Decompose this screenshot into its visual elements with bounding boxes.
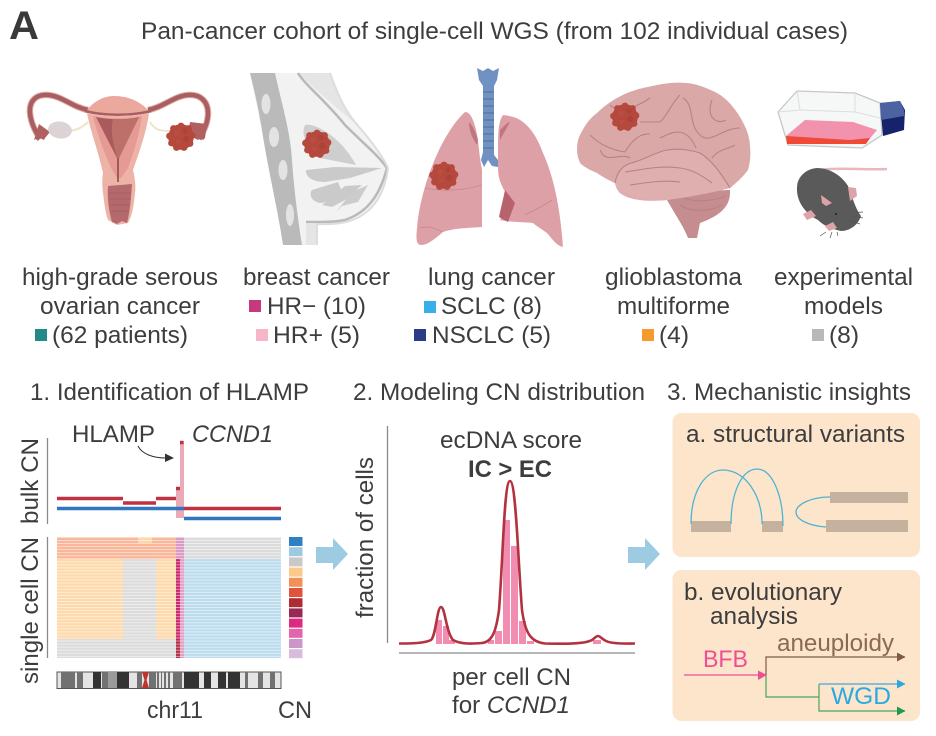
heading: step 1: 1. Identification of HLAMP	[30, 379, 309, 406]
panel heading: a. structural variants	[686, 421, 905, 448]
label: lung cancer: lung cancer	[428, 264, 555, 291]
heading: step 3: 3. Mechanistic insights	[667, 379, 911, 406]
label: WGD: WGD	[831, 683, 891, 710]
label: ovarian cancer: (62 patients)	[52, 322, 188, 349]
chromosome ideogram	[57, 672, 281, 688]
label: experimental models: experimental	[774, 264, 913, 291]
title: Pan-cancer cohort of single-cell WGS (from 102 individual cases)	[141, 18, 848, 45]
single cell heatmap	[17, 537, 281, 684]
chart title: ecDNA score	[440, 427, 582, 454]
label: lung cancer: NSCLC (5)	[432, 322, 551, 349]
label: lung cancer	[414, 264, 555, 349]
label: ovarian cancer: high-grade serous	[22, 264, 218, 291]
icon: lungs with tumor	[416, 68, 563, 247]
chart score: IC > EC	[468, 456, 552, 483]
breakpoint arcs	[691, 469, 830, 527]
label: CCND1: CCND1	[192, 421, 273, 448]
axis label: fraction of cells: fraction of cells	[352, 457, 379, 618]
red allele segments	[57, 442, 281, 508]
label: glioblastoma	[605, 264, 743, 349]
x axis label line 2: for CCND1	[452, 692, 570, 719]
label: lung cancer: SCLC (8)	[441, 293, 542, 320]
histogram bars	[436, 520, 601, 644]
axis label: single cell CN: single cell CN	[17, 537, 44, 684]
x axis label line 1: per cell CN	[452, 664, 571, 691]
icon: mouse	[797, 168, 887, 238]
label: aneuploidy: aneuploidy	[777, 630, 894, 657]
icon: breast with tumor	[250, 73, 388, 245]
label: breast cancer: breast cancer	[243, 264, 390, 291]
panel heading: b. evolutionary	[684, 579, 842, 606]
label: BFB: BFB	[703, 646, 748, 673]
arrow: HLAMP	[138, 446, 174, 462]
label: ovarian cancer: ovarian cancer	[40, 293, 200, 320]
label: glioblastoma: glioblastoma	[605, 264, 743, 291]
label: breast cancer: HR+ (5)	[273, 322, 360, 349]
panel: structural variants	[672, 413, 920, 557]
blue allele segments	[57, 508, 281, 518]
axis label: bulk CN: bulk CN	[17, 438, 44, 524]
label: experimental models: (8)	[829, 322, 859, 349]
density curve	[399, 481, 635, 644]
label: experimental models	[774, 264, 913, 349]
label: breast cancer	[243, 264, 390, 349]
heading: step 2: 2. Modeling CN distribution	[353, 379, 645, 406]
bulk CN plot	[17, 421, 281, 524]
CN distribution chart	[352, 426, 635, 719]
label: HLAMP: HLAMP	[72, 421, 155, 448]
tree branches	[766, 657, 905, 675]
icon: uterus with ovarian tumor	[30, 95, 208, 225]
CN colour legend	[289, 537, 302, 658]
label: glioblastoma: (4)	[659, 322, 689, 349]
arrowheads	[758, 670, 767, 680]
arrow: step 1 to 2	[316, 538, 348, 570]
panel: evolutionary analysis	[672, 570, 920, 721]
arrow: step 2 to 3	[628, 538, 660, 570]
genome segments	[691, 492, 908, 532]
panel: evolutionary analysis: analysis	[710, 603, 798, 630]
label: experimental models: models	[804, 293, 883, 320]
panel letter: A	[9, 4, 39, 48]
icon: culture flask	[778, 91, 905, 148]
label: ovarian cancer	[22, 264, 218, 349]
amplification spike	[176, 441, 184, 518]
label: chr11: chr11	[147, 697, 203, 724]
label: glioblastoma: multiforme	[617, 293, 730, 320]
label: CN: CN	[278, 697, 312, 724]
label: breast cancer: HR− (10)	[267, 293, 366, 320]
icon: brain with tumor	[577, 83, 750, 238]
